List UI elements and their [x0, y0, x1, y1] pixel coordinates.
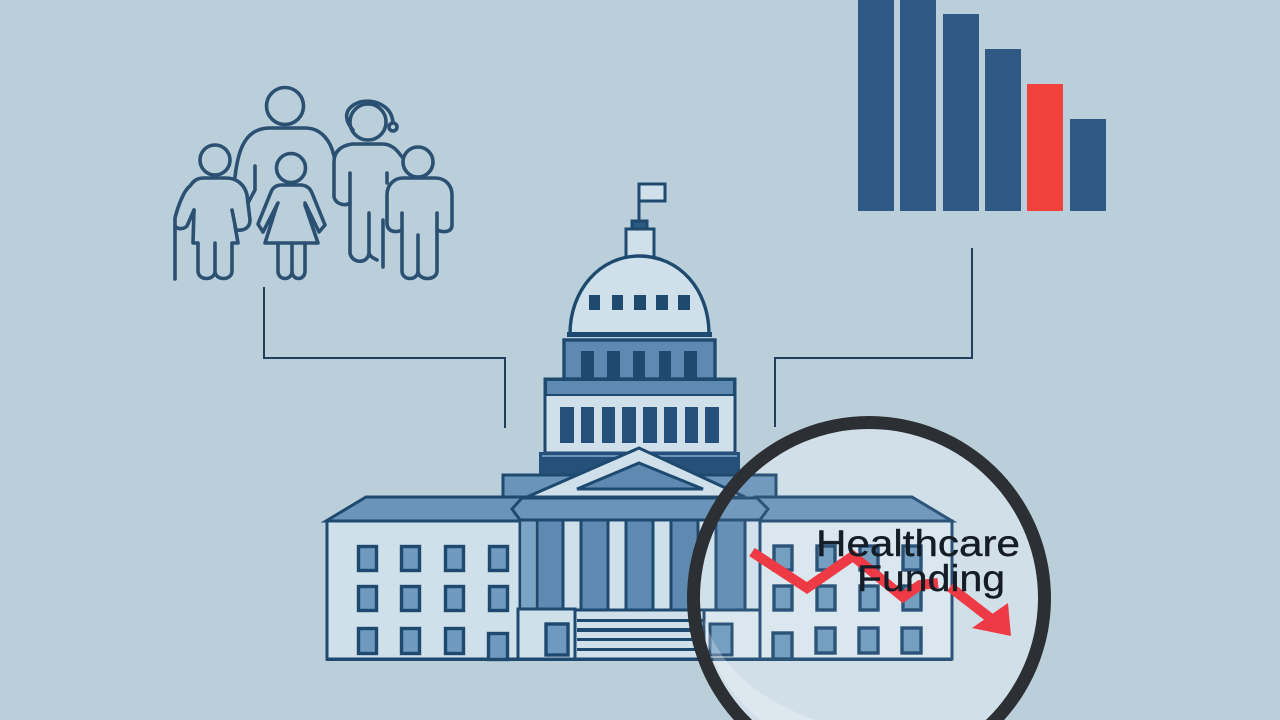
lens label: Funding	[857, 558, 1005, 599]
icon: adult with headset	[334, 101, 402, 267]
icon: centre child in dress	[258, 154, 325, 278]
icon: right child	[387, 147, 452, 278]
entrance steps	[575, 610, 705, 659]
falling red trend line	[752, 552, 1011, 636]
dome	[567, 256, 712, 337]
bar chart	[858, 0, 1106, 211]
icon: central adult	[235, 88, 334, 203]
side roof blocks	[503, 475, 776, 498]
capitol building	[326, 184, 952, 661]
lens ring	[687, 416, 1051, 720]
lens highlight	[704, 620, 815, 720]
lens tint	[694, 423, 1044, 720]
lens label: Healthcare	[816, 523, 1020, 564]
icon: elder with cane	[175, 145, 250, 279]
icon: group of people	[175, 88, 452, 279]
connector: people to capitol	[264, 287, 505, 428]
connector: bar chart to capitol	[775, 248, 972, 427]
lens glass background	[694, 423, 1044, 720]
highlighted red bar	[1027, 84, 1063, 211]
lower drum	[545, 379, 735, 453]
lens label	[816, 523, 1020, 599]
right wing	[755, 497, 952, 659]
left entrance block	[518, 609, 575, 659]
dark band	[539, 452, 740, 476]
magnifying glass	[687, 416, 1051, 720]
left wing	[326, 497, 525, 660]
flag and lantern	[626, 184, 665, 257]
central portico	[512, 448, 768, 659]
upper drum	[564, 340, 715, 379]
right entrance block	[704, 610, 760, 659]
pediment	[527, 448, 745, 497]
